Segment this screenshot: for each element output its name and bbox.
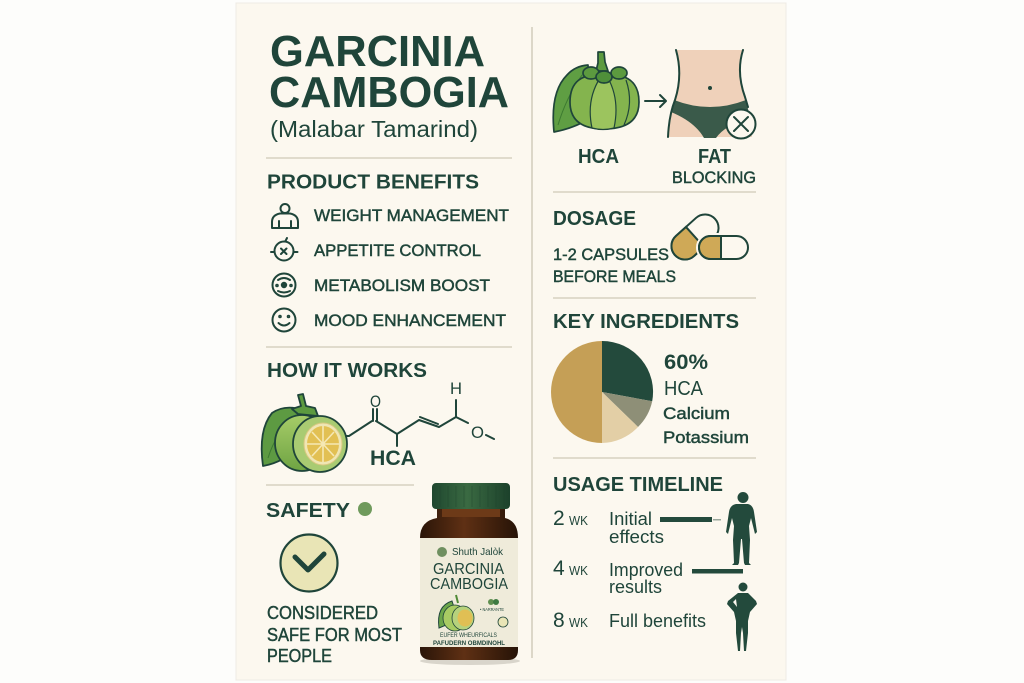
arrow [645, 95, 666, 107]
text: safety statement: CONSIDERED [267, 603, 378, 623]
chart: HCA molecule [346, 379, 494, 470]
row: 2 weeks: effects [609, 527, 664, 547]
row: 8 weeks: WK [569, 615, 588, 630]
row: 8 weeks: 8 [553, 609, 565, 632]
benefit: appetite control: APPETITE CONTROL [314, 242, 481, 260]
row: 8 weeks: Full benefits [609, 611, 706, 631]
text: safety statement [267, 603, 402, 666]
benefit: weight management: WEIGHT MANAGEMENT [314, 207, 509, 225]
heading: how it works: HOW IT WORKS [267, 360, 427, 382]
row: 4 weeks: WK [569, 563, 588, 578]
icon: figure one [726, 492, 757, 565]
chart: HCA molecule: O [471, 423, 484, 442]
heading: dosage: DOSAGE [553, 207, 636, 230]
text: safety statement: PEOPLE [267, 646, 332, 666]
legend: HCA [664, 378, 704, 400]
label: HCA: HCA [578, 146, 619, 168]
row: 2 weeks: 2 [553, 507, 565, 530]
panel: safety [266, 500, 402, 666]
row: 2 weeks [553, 507, 721, 547]
benefit: metabolism boost: METABOLISM BOOST [314, 277, 490, 295]
heading: usage timeline: USAGE TIMELINE [553, 474, 723, 496]
title: (Malabar Tamarind) [270, 116, 478, 142]
product bottle: CAMBOGIA [430, 576, 509, 593]
chart: ingredients pie [551, 341, 653, 443]
heading: safety: SAFETY [266, 500, 351, 522]
row: 2 weeks: Initial [609, 509, 652, 529]
text: dosage instruction [553, 246, 676, 286]
text: dosage instruction: 1-2 CAPSULES [553, 246, 669, 264]
icon: whole garcinia fruit [553, 52, 639, 132]
product bottle: • NARRANTE [480, 607, 504, 612]
title: GARCINIA [270, 27, 485, 76]
label: fat blocking: FAT [698, 146, 731, 168]
icon: appetite target [271, 238, 298, 260]
heading: product benefits: PRODUCT BENEFITS [267, 172, 479, 194]
text: dosage instruction: BEFORE MEALS [553, 268, 676, 286]
legend: Potassium [663, 428, 749, 447]
panel: how it works [262, 360, 494, 472]
icon: figure two [727, 582, 757, 651]
chart: HCA molecule: H [450, 379, 462, 398]
icon: person [272, 204, 298, 228]
legend: Calcium [663, 404, 730, 423]
icon: smile [272, 308, 296, 332]
product bottle: Shuth Jalòk [452, 546, 504, 558]
row: 8 weeks [553, 609, 706, 632]
icon: green dot [358, 502, 372, 516]
icon: check badge [280, 534, 338, 592]
panel: mechanism [553, 50, 756, 187]
icon: fruit with cut slice [262, 394, 347, 472]
product bottle [420, 483, 520, 665]
row: 4 weeks [553, 557, 743, 597]
panel: dosage [553, 207, 748, 286]
row: 4 weeks: Improved [609, 560, 683, 580]
label: fat blocking [672, 146, 756, 187]
label: HCA: HCA [370, 447, 416, 470]
benefit: mood enhancement: MOOD ENHANCEMENT [314, 312, 506, 330]
icon: metabolism [272, 274, 296, 296]
row: 4 weeks: 4 [553, 557, 565, 580]
product bottle: PAFUDERN OBMDINOHL [433, 640, 505, 647]
panel: product benefits [267, 172, 509, 332]
label: fat blocking: BLOCKING [672, 169, 756, 187]
product bottle: EUFER WHEURFICALS [440, 632, 498, 639]
panel: key ingredients [551, 311, 749, 447]
title [269, 27, 509, 142]
heading: key ingredients: KEY INGREDIENTS [553, 311, 739, 333]
row: 2 weeks: WK [569, 513, 588, 528]
panel: usage timeline [553, 474, 757, 651]
product bottle: GARCINIA [433, 561, 505, 578]
text: safety statement: SAFE FOR MOST [267, 625, 402, 645]
panel: page background [236, 3, 786, 680]
row: 4 weeks: results [609, 577, 662, 597]
legend: 60% [664, 351, 708, 374]
icon: torso with fat blocking [668, 50, 756, 138]
chart: HCA molecule: O [370, 392, 381, 411]
icon: capsules [666, 209, 748, 265]
title: CAMBOGIA [269, 68, 509, 117]
legend [663, 351, 749, 447]
